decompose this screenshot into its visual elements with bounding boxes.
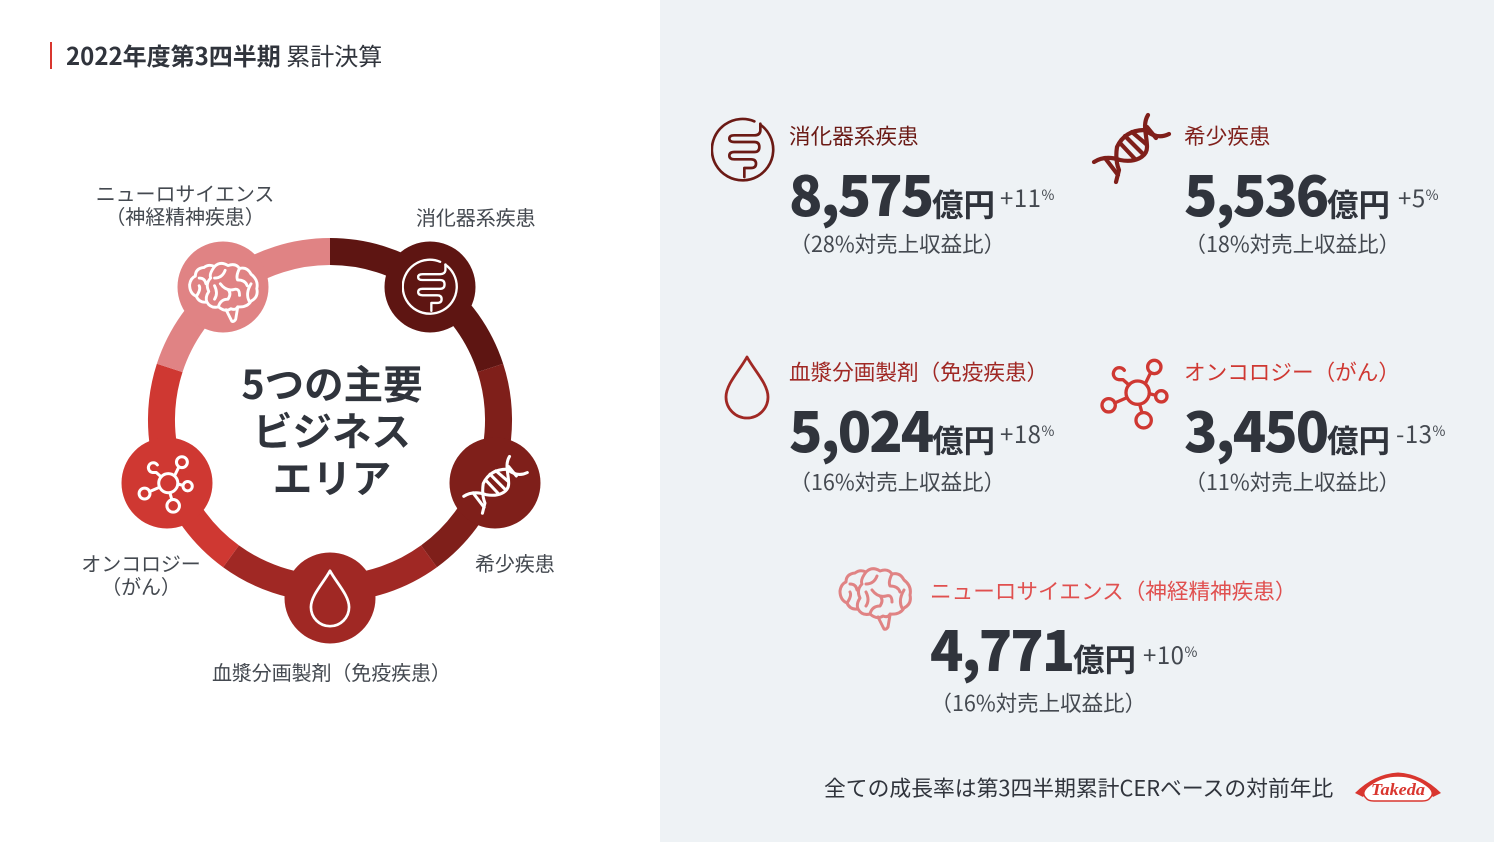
label: neuroscience: ニューロサイエンス	[96, 178, 274, 207]
label: gastro: 消化器系疾患	[416, 202, 535, 230]
ring center heading	[241, 354, 423, 505]
unit: 億円	[1327, 416, 1390, 462]
unit: 億円	[1327, 180, 1390, 226]
panel: oncology result	[1100, 356, 1446, 497]
node: neuroscience	[178, 242, 268, 332]
node: gastro	[384, 242, 476, 332]
icon: intestine	[711, 118, 775, 182]
icon: molecule	[1100, 358, 1169, 430]
icon: DNA in node	[462, 454, 529, 515]
growth rate: +5%	[1398, 179, 1439, 214]
revenue value: 5,536	[1184, 152, 1327, 232]
revenue value: 3,450	[1184, 388, 1327, 468]
ring segment: oncology	[161, 368, 231, 556]
share of revenue: （28%対売上収益比）	[790, 228, 1005, 259]
logo capsule	[1364, 776, 1432, 801]
ring center heading: 5つの主要	[241, 354, 423, 411]
logo: Takeda	[1355, 772, 1441, 802]
revenue value: 5,024	[789, 388, 932, 468]
growth rate: +11%	[1000, 179, 1055, 214]
icon: drop in node	[310, 569, 350, 628]
panel: rare diseases result	[1092, 112, 1439, 259]
footnote: 全ての成長率は第3四半期累計CERベースの対前年比	[824, 772, 1333, 803]
category name: 消化器系疾患	[789, 120, 919, 151]
label: oncology: （がん）	[101, 571, 181, 600]
ring segment: plasma	[231, 556, 429, 588]
growth rate: +18%	[1000, 415, 1055, 450]
share of revenue: （18%対売上収益比）	[1184, 228, 1400, 259]
share of revenue: （16%対売上収益比）	[930, 687, 1146, 718]
share of revenue: （11%対売上収益比）	[1184, 466, 1400, 497]
label: plasma: 血漿分画製剤（免疫疾患）	[212, 656, 451, 686]
logo wordmark: Takeda	[1371, 780, 1426, 799]
label: neuroscience: （神経精神疾患）	[105, 201, 265, 230]
revenue value: 4,771	[930, 607, 1073, 687]
unit: 億円	[932, 416, 995, 462]
panel: neuroscience result	[838, 567, 1296, 718]
category name: 希少疾患	[1184, 120, 1270, 151]
title: 2022年度第3四半期 累計決算	[66, 37, 382, 72]
category name: ニューロサイエンス（神経精神疾患）	[930, 575, 1296, 606]
category name: オンコロジー（がん）	[1184, 356, 1400, 387]
label: oncology	[81, 548, 201, 600]
growth rate: -13%	[1396, 415, 1446, 450]
ring center heading: ビジネス	[253, 401, 411, 458]
revenue value: 8,575	[789, 152, 932, 232]
node: oncology	[122, 438, 212, 528]
panel: plasma result	[724, 356, 1055, 497]
panel: right background	[660, 0, 1494, 842]
unit: 億円	[932, 180, 995, 226]
icon: molecule in node	[138, 455, 194, 514]
icon: brain in node	[188, 262, 259, 323]
node: plasma	[284, 552, 376, 644]
ring center heading: エリア	[273, 448, 391, 505]
icon: DNA	[1092, 112, 1172, 184]
icon: intestine in node	[402, 258, 458, 315]
icon: drop	[724, 356, 770, 420]
ring segment: rare diseases	[429, 368, 499, 556]
share of revenue: （16%対売上収益比）	[790, 466, 1005, 497]
label: oncology: オンコロジー	[81, 548, 201, 577]
category name: 血漿分画製剤（免疫疾患）	[789, 356, 1048, 387]
unit: 億円	[1073, 635, 1136, 681]
ring segment: neuroscience	[170, 252, 330, 368]
growth rate: +10%	[1143, 636, 1198, 671]
panel: gastro result	[711, 118, 1055, 259]
label: rare diseases: 希少疾患	[475, 548, 555, 576]
ring chart: five business areas	[122, 238, 540, 644]
logo wings	[1355, 772, 1441, 797]
title accent bar	[50, 42, 52, 69]
label: neuroscience	[96, 178, 274, 230]
icon: brain	[838, 567, 912, 631]
ring segment: gastro	[330, 252, 490, 368]
node: rare diseases	[450, 438, 540, 528]
